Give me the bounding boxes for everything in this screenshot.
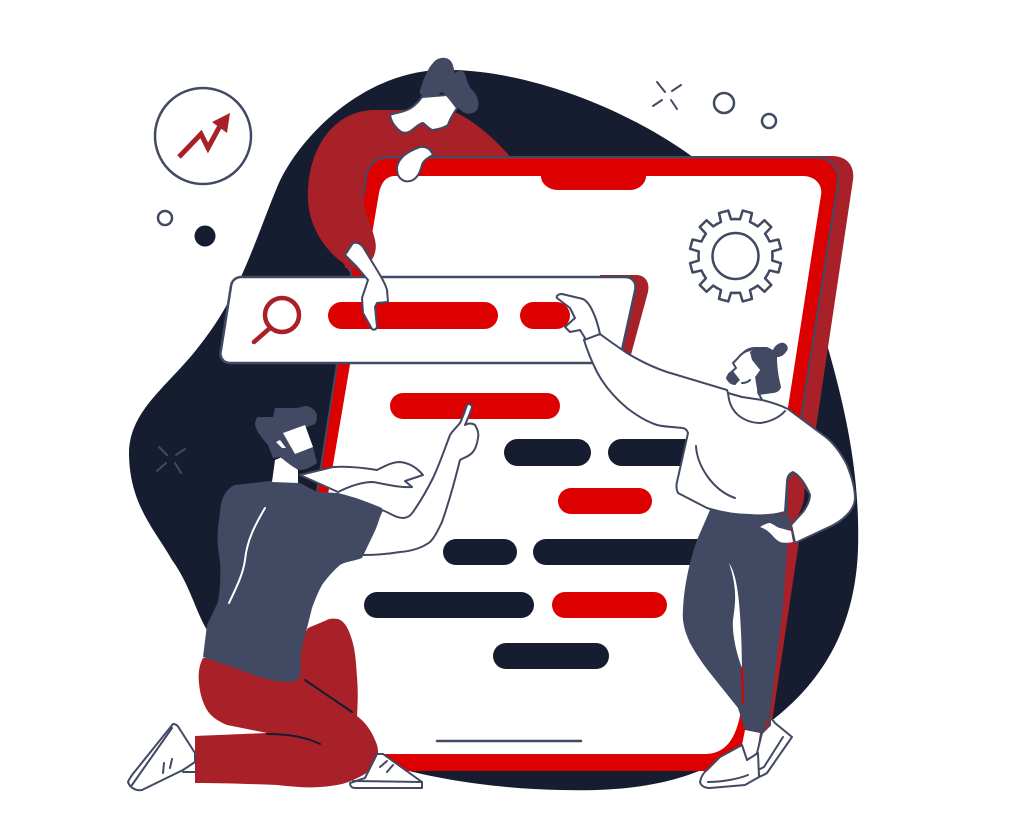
- sparkle top right: [653, 82, 681, 109]
- trend circle icon: [155, 88, 251, 184]
- phone shadow edge: [390, 156, 853, 770]
- left person: front shoe: [350, 754, 422, 788]
- left person: shirt highlight: [229, 508, 265, 603]
- left person: back shoe: [128, 724, 195, 790]
- result pills: [364, 393, 713, 669]
- person top: hand over search bar: [345, 243, 388, 330]
- home bar: [437, 740, 581, 742]
- person left: [128, 404, 478, 790]
- left person: face: [283, 425, 313, 454]
- background blob: [129, 70, 858, 790]
- right person: front shoe: [700, 745, 759, 788]
- person top: red body: [308, 110, 520, 277]
- phone outline: [300, 157, 838, 730]
- left person: shirt: [203, 481, 382, 682]
- person top: hand on phone edge: [397, 147, 433, 181]
- decorative dots: [158, 93, 776, 246]
- right person: gap between legs: [729, 563, 742, 668]
- person top: hair: [420, 58, 478, 114]
- person top: body in front of phone edge: [345, 190, 376, 268]
- person top: face: [390, 95, 457, 133]
- phone screen: [289, 176, 821, 754]
- search bar shadow: [600, 275, 648, 362]
- phone body: [278, 159, 838, 771]
- left person: red trousers: [195, 619, 378, 787]
- search bar text pills: [328, 302, 570, 329]
- right person: face: [729, 350, 762, 400]
- right person: sweater and arm: [584, 334, 855, 543]
- right person: sleeve fold: [696, 446, 735, 498]
- sparkle on blob: [157, 447, 185, 473]
- right person: ankles: [742, 730, 760, 760]
- search bar: [220, 277, 636, 363]
- left person: ear: [276, 440, 286, 448]
- right person: pointing hand: [557, 294, 600, 340]
- left person: neck: [272, 457, 298, 483]
- person top: head: [390, 58, 478, 133]
- right person: gap at hip: [787, 472, 810, 525]
- right person: hair: [742, 343, 788, 395]
- right person: hand on hip: [760, 523, 793, 543]
- left person: near arm with pointing hand: [362, 404, 478, 555]
- gear icon: [689, 209, 782, 303]
- search icon: magnifier: [254, 298, 299, 342]
- left person: far arm: [300, 462, 423, 492]
- right person: back shoe: [757, 717, 792, 777]
- trend arrow: [179, 124, 221, 157]
- phone notch: [541, 170, 646, 190]
- left person: hair and beard: [255, 406, 317, 470]
- right person: trousers: [683, 510, 790, 733]
- right person: collar: [728, 393, 785, 423]
- left person: trouser folds: [267, 680, 352, 744]
- person right: [557, 294, 855, 788]
